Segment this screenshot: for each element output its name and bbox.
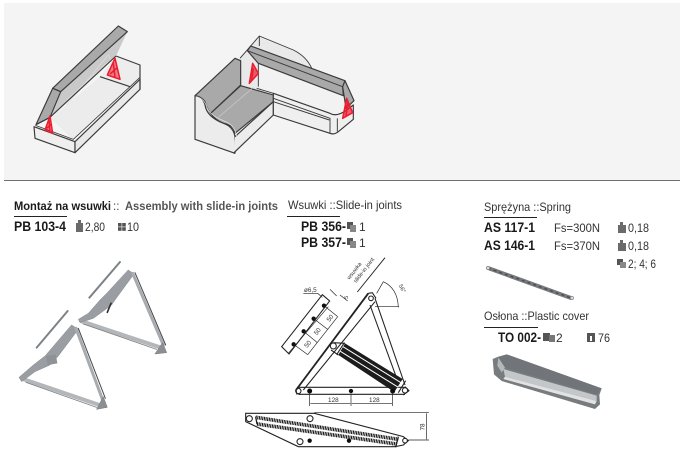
- slide direction arrow with label: slide-in joint: [353, 257, 376, 284]
- product row: PB 103-4: PB 103-4: [14, 219, 66, 234]
- slide-in plate: 5: [344, 296, 350, 299]
- heading: assembly: Assembly with slide-in joints: [125, 201, 278, 213]
- icon: red mechanism right corner: [343, 98, 353, 118]
- icon: packaging: [543, 333, 555, 342]
- product row: AS 146-1: Fs=370N: [554, 239, 600, 253]
- icon: red mechanism left: [45, 116, 53, 133]
- photo: triangular lift brackets: [19, 262, 167, 409]
- photo: plastic cover: [493, 354, 602, 409]
- illustration: sofa bed with lifted lid: [34, 26, 140, 153]
- product rows: PB 356 and PB 357: PB 357-: [301, 235, 346, 250]
- dimensions: base 128 128: 128: [369, 397, 380, 404]
- product rows: PB 356 and PB 357: 1: [359, 236, 366, 250]
- product row: AS 117-1: 0,18: [628, 221, 649, 235]
- pack sizes: 2; 4; 6: [628, 257, 656, 271]
- product row: TO 002: [498, 330, 610, 345]
- icon: red mechanism left corner: [249, 63, 258, 83]
- slide-in plate: 50: [326, 313, 336, 323]
- product rows: PB 356 and PB 357: PB 356-: [301, 219, 346, 234]
- product row: AS 117-1: Fs=300N: [554, 221, 600, 235]
- product row: AS 146-1: 0,18: [628, 239, 649, 253]
- product rows: PB 356 and PB 357: [301, 219, 366, 250]
- dimensions: base 128 128: [310, 393, 393, 406]
- product row: AS 117-1: [484, 220, 649, 235]
- icon: grid: [118, 223, 126, 231]
- icon: red mechanism right: [107, 58, 120, 79]
- product row: AS 146-1: AS 146-1: [484, 238, 535, 253]
- icon: packaging: [347, 222, 356, 232]
- product row: TO 002: 76: [598, 331, 610, 345]
- angle dimension: [375, 282, 406, 307]
- slide-in plate: 50: [313, 326, 323, 337]
- product row: PB 103-4: 10: [127, 220, 139, 234]
- heading: assembly: ::: [113, 201, 119, 213]
- heading: plastic cover: [484, 309, 589, 328]
- slide direction arrow with label: wsuwka: [346, 261, 364, 282]
- photo: spring: [486, 266, 574, 300]
- bracket: left: [19, 311, 107, 409]
- technical drawing: open mechanism with dimensions: [246, 257, 429, 447]
- heading: spring: Sprężyna ::Spring: [484, 200, 571, 214]
- illustration: corner sofa: [195, 36, 354, 153]
- product row: PB 103-4: [14, 219, 139, 234]
- product row: PB 103-4: 2,80: [85, 220, 105, 234]
- slide-in plate: [282, 287, 350, 355]
- slide-in plate: ø6,5: [304, 287, 317, 294]
- panel: sofa illustrations: [4, 3, 680, 181]
- icon: weight: [618, 240, 626, 251]
- product row: TO 002: TO 002-: [498, 330, 541, 345]
- product rows: PB 356 and PB 357: 1: [359, 220, 366, 234]
- heading: assembly: [14, 201, 278, 217]
- bracket: right: [78, 262, 167, 354]
- heading: plastic cover: Osłona ::Plastic cover: [484, 309, 589, 323]
- angle dimension: 56°: [397, 284, 406, 294]
- gas spring: [337, 343, 406, 393]
- folded mechanism: 78: [419, 423, 426, 431]
- icon: weight: [76, 220, 83, 232]
- icon: weight: [618, 222, 626, 233]
- heading: slide-in joints: Wsuwki ::Slide-in joints: [288, 198, 402, 212]
- slide direction arrow with label: [346, 257, 385, 292]
- product row: AS 146-1: [484, 238, 649, 253]
- dimensions: base 128 128: 128: [328, 397, 339, 404]
- pack sizes: [617, 257, 656, 271]
- icon: info: [587, 333, 595, 342]
- arm and base frame: [296, 293, 409, 395]
- slide-in plate: 50: [303, 339, 313, 349]
- folded mechanism: [246, 412, 429, 447]
- heading: assembly: Montaż na wsuwki: [14, 201, 111, 213]
- heading: slide-in joints: [287, 198, 402, 217]
- mounting holes: [307, 388, 395, 393]
- product row: TO 002: 2: [556, 331, 563, 345]
- icon: packaging: [347, 238, 356, 248]
- icon: packaging: [617, 259, 626, 268]
- product row: AS 117-1: AS 117-1: [484, 220, 535, 235]
